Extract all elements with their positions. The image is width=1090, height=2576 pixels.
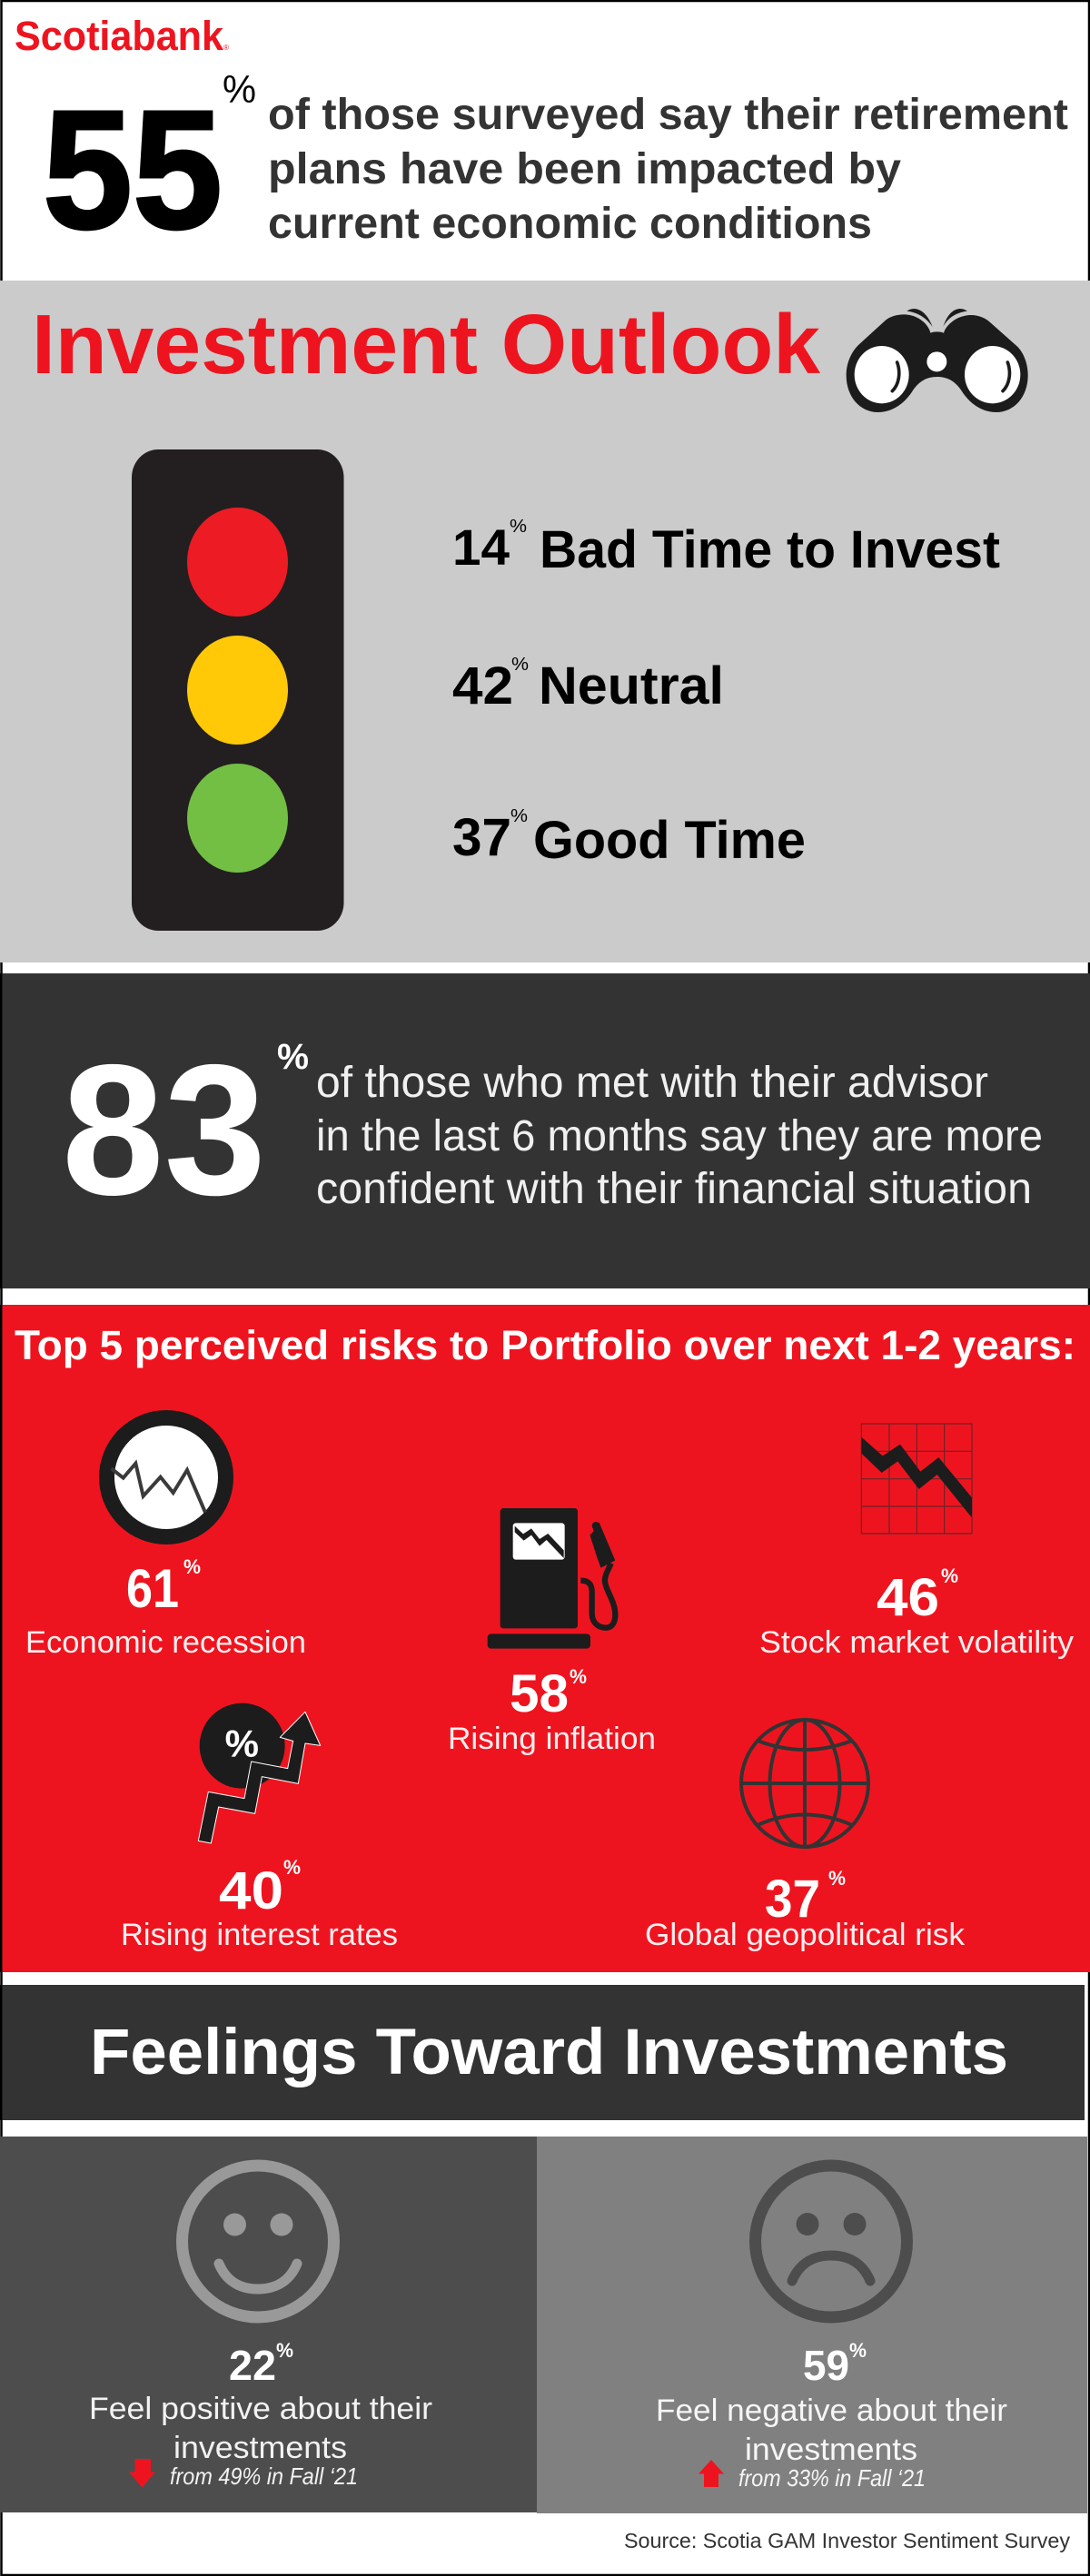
heading banner: Feelings Toward Investments: Feelings Toward Investments bbox=[90, 2017, 1008, 2088]
icon: fuel pump bbox=[488, 1508, 615, 1649]
risk: rising inflation bbox=[448, 1508, 656, 1756]
stat: 42 percent neutral: Neutral bbox=[539, 656, 724, 716]
stat: 37 percent bbox=[765, 1867, 846, 1929]
stat: 22 percent bbox=[229, 2339, 293, 2389]
risk: stock market volatility bbox=[759, 1424, 1074, 1660]
logo: Scotiabank: Scotiabank bbox=[15, 13, 224, 59]
panel: negative feelings bbox=[537, 2137, 1087, 2513]
heading: Investment Outlook: Investment Outlook bbox=[32, 297, 820, 391]
stat: 22 percent: 22 bbox=[229, 2342, 276, 2389]
big number 83 percent: % bbox=[277, 1037, 309, 1077]
risk: rising interest rates bbox=[121, 1703, 398, 1952]
icon: sad face bbox=[756, 2166, 907, 2317]
stat: 59 percent bbox=[803, 2339, 867, 2389]
text: feel negative: investments bbox=[745, 2433, 917, 2467]
logo: Scotiabank: ® bbox=[223, 44, 229, 52]
label: rising inflation: Rising inflation bbox=[448, 1722, 656, 1756]
icon: globe bbox=[741, 1720, 868, 1847]
stat: 61 percent: 61 bbox=[126, 1558, 179, 1619]
icon: red down arrow bbox=[129, 2459, 155, 2488]
stat: 37 percent: 37 bbox=[765, 1870, 820, 1929]
text: change from 49 percent: from 49% in Fall ‘21 bbox=[170, 2462, 358, 2490]
stat: 22 percent: % bbox=[276, 2339, 293, 2362]
icon: percent coin with rising arrow bbox=[198, 1703, 321, 1843]
stat: 42 percent neutral: % bbox=[511, 655, 529, 675]
icon: binoculars bbox=[847, 309, 1028, 412]
icon: recession gauge bbox=[107, 1418, 225, 1536]
text: retirement plans statement: of those surveyed say their retirement bbox=[268, 91, 1068, 139]
stat: 14 percent bad time to invest: 14 bbox=[452, 518, 510, 576]
big number 55 percent: % bbox=[223, 68, 256, 112]
stat: 59 percent: % bbox=[849, 2339, 867, 2362]
stat: 37 percent good time: 37 bbox=[452, 808, 511, 867]
stat: 14 percent bad time to invest: Bad Time to Invest bbox=[540, 520, 1000, 579]
stat: 61 percent: % bbox=[183, 1555, 201, 1578]
stat: 40 percent bbox=[219, 1856, 301, 1920]
text: advisor statement: in the last 6 months say they are more bbox=[316, 1112, 1043, 1160]
label: rising interest rates: Rising interest rates bbox=[121, 1918, 398, 1952]
stat: 46 percent: 46 bbox=[877, 1568, 939, 1627]
stat: 42 percent neutral: 42 bbox=[452, 656, 513, 716]
icon: percent coin with rising arrow: % bbox=[225, 1722, 259, 1765]
stat: 59 percent: 59 bbox=[803, 2342, 849, 2389]
label: economic recession: Economic recession bbox=[25, 1625, 306, 1660]
heading: top 5 risks: Top 5 perceived risks to Portfolio over next 1-2 years: bbox=[15, 1322, 1075, 1368]
stat: 42 percent neutral bbox=[452, 655, 724, 716]
panel: investment outlook bbox=[0, 281, 1090, 962]
panel: advisor confidence bbox=[0, 973, 1090, 1288]
text: feel negative: Feel negative about their bbox=[656, 2393, 1007, 2428]
stat: 40 percent: % bbox=[283, 1856, 301, 1879]
text: retirement plans statement: current economic conditions bbox=[268, 200, 872, 248]
icon: falling stock chart bbox=[861, 1424, 972, 1534]
big number 55 percent: 55 bbox=[43, 76, 223, 264]
label: stock market volatility: Stock market volatility bbox=[759, 1625, 1074, 1660]
stat: 14 percent bad time to invest: % bbox=[510, 517, 527, 537]
text: feel positive: Feel positive about their bbox=[89, 2392, 432, 2426]
stat: 46 percent bbox=[877, 1564, 958, 1627]
text: change from 33 percent: from 33% in Fall ‘21 bbox=[738, 2464, 926, 2492]
icon: traffic light bbox=[132, 449, 343, 931]
stat: 37 percent: % bbox=[828, 1867, 846, 1890]
text: feel positive bbox=[89, 2392, 432, 2465]
icon: smiley face bbox=[182, 2166, 334, 2317]
text: retirement plans statement bbox=[268, 91, 1068, 248]
text: feel negative bbox=[656, 2393, 1007, 2467]
panel: top 5 perceived risks bbox=[0, 1305, 1090, 1972]
label: global geopolitical risk: Global geopolitical risk bbox=[645, 1918, 966, 1952]
icon: red up arrow bbox=[699, 2460, 724, 2487]
stat: 37 percent good time: Good Time bbox=[533, 811, 806, 870]
risk: global geopolitical risk bbox=[645, 1720, 966, 1952]
panel: header statistic bbox=[15, 13, 1068, 264]
text: source line: Source: Scotia GAM Investor Sentiment Survey bbox=[624, 2529, 1071, 2552]
stat: 58 percent: 58 bbox=[510, 1664, 569, 1723]
text: advisor statement: confident with their financial situation bbox=[316, 1165, 1032, 1213]
stat: 40 percent: 40 bbox=[219, 1861, 283, 1920]
panel: positive feelings bbox=[0, 2137, 537, 2512]
stat: 46 percent: % bbox=[941, 1564, 958, 1587]
risk: economic recession bbox=[25, 1418, 306, 1660]
big number 83 percent: 83 bbox=[62, 1026, 266, 1234]
text: advisor statement bbox=[316, 1059, 1043, 1213]
text: feel positive: investments bbox=[173, 2431, 347, 2465]
text: advisor statement: of those who met with their advisor bbox=[316, 1059, 988, 1107]
stat: 58 percent: % bbox=[570, 1665, 587, 1688]
text: retirement plans statement: plans have been impacted by bbox=[268, 145, 901, 193]
heading banner: Feelings Toward Investments bbox=[0, 1985, 1085, 2120]
stat: 37 percent good time: % bbox=[510, 806, 528, 826]
